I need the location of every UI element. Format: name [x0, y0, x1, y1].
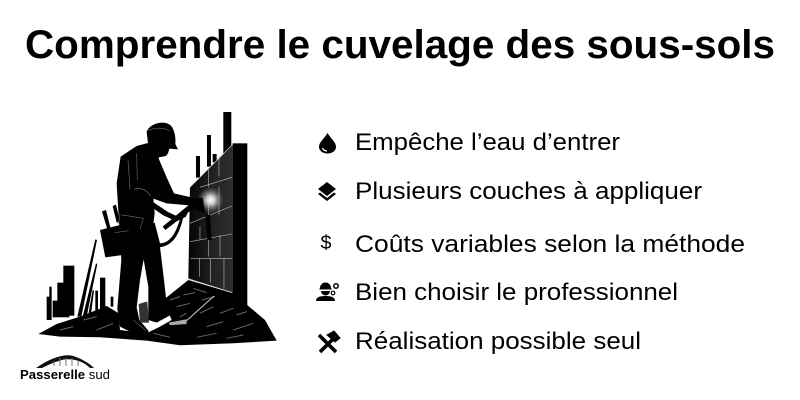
- item: cost: Coûts variables selon la méthode: [355, 231, 745, 258]
- background posts left: [47, 239, 113, 320]
- left leg: [117, 215, 153, 336]
- list of key points: [316, 129, 745, 355]
- item: professional: Bien choisir le professionnel: [355, 279, 678, 306]
- right leg: [137, 217, 174, 323]
- logo: Passerelle sud: [20, 355, 110, 382]
- title: Comprendre le cuvelage des sous-sols: [25, 23, 775, 67]
- arm to the sprayer: [133, 159, 205, 221]
- icon: water drop: [319, 133, 336, 154]
- helmet and head: [147, 123, 178, 163]
- illustration: worker waterproofing a basement wall: [38, 112, 277, 345]
- wall with brick courses: [188, 112, 247, 310]
- item: water: Empêche l’eau d’entrer: [355, 129, 620, 156]
- rubble and ground: [38, 280, 277, 345]
- torso: [117, 143, 169, 224]
- light details on worker: [115, 128, 169, 331]
- icon: dollar: $: [320, 233, 332, 254]
- sprayer and hose: [163, 204, 194, 230]
- icon: layers: [318, 182, 336, 201]
- logo wordmark: Passerelle sud: [20, 367, 110, 382]
- icon: hammer and wrench: [319, 331, 340, 352]
- item: layers: Plusieurs couches à appliquer: [355, 178, 702, 205]
- item: tools: Réalisation possible seul: [355, 328, 641, 355]
- logo bridge arch: [36, 355, 94, 368]
- icon: worker with gear: [316, 283, 338, 301]
- tool belt: [102, 205, 120, 229]
- worker silhouette: [100, 123, 205, 336]
